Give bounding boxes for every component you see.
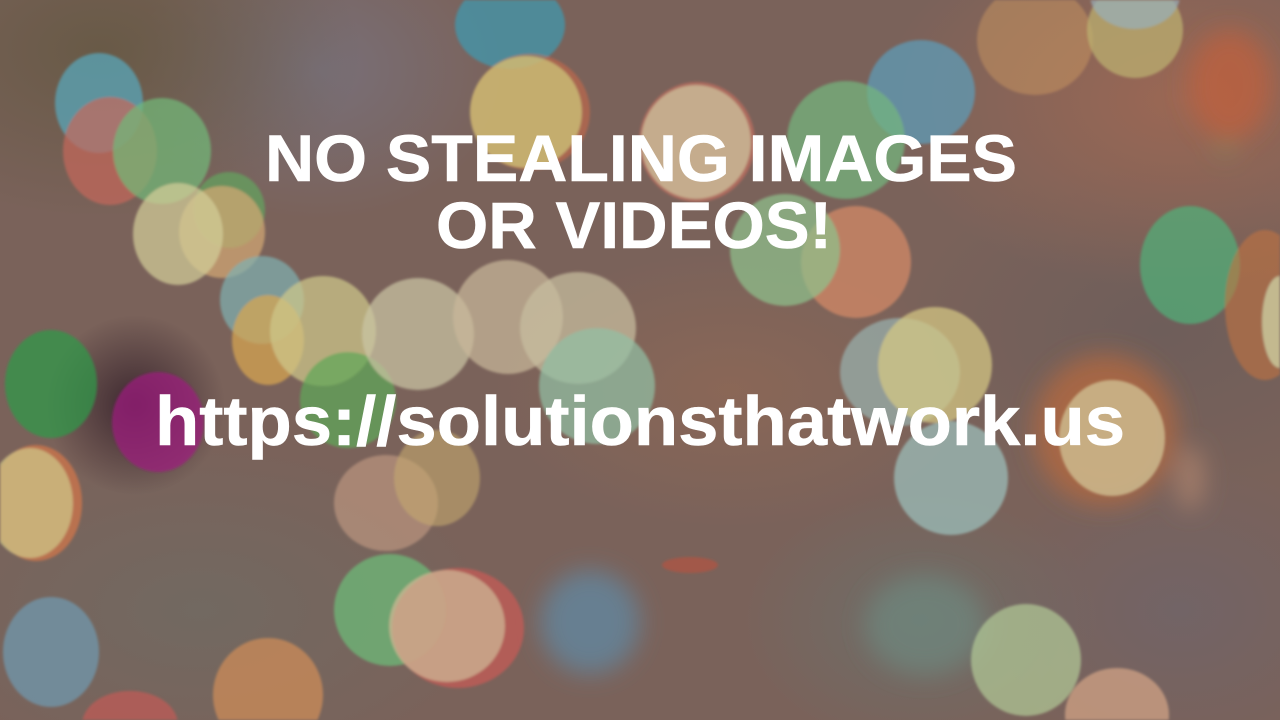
website url: https://solutionsthatwork.us	[155, 382, 1125, 460]
title: no stealing: NO STEALING IMAGES	[265, 121, 1017, 195]
title: no stealing	[265, 121, 1017, 262]
soft out-of-focus spots	[540, 30, 1272, 675]
title: no stealing: OR VIDEOS!	[436, 188, 832, 262]
